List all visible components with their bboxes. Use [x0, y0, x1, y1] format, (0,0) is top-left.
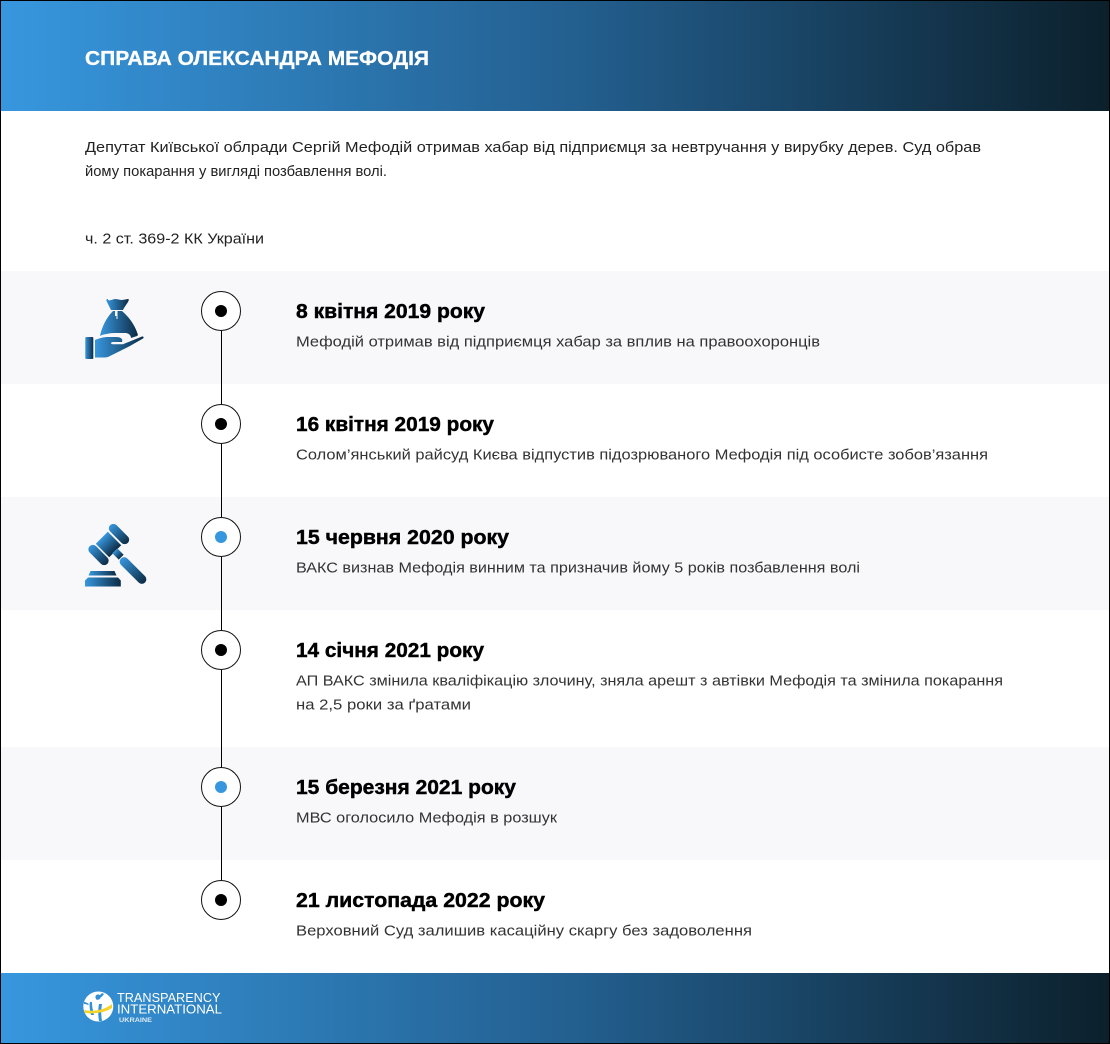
- event: 16 April 2019: Солом’янський райсуд Києва відпустив підозрюваного Мефодія під особисте зобов’язання: [296, 448, 988, 464]
- timeline marker: 15 June 2020: [202, 518, 240, 556]
- footer banner: [1, 973, 1109, 1043]
- logo: Transparency International Ukraine: TRANSPARENCY: [117, 990, 221, 1005]
- title: СПРАВА ОЛЕКСАНДРА МЕФОДІЯ: [85, 48, 429, 70]
- event: 21 November 2022: [296, 889, 752, 940]
- event: 14 January 2021: на 2,5 роки за ґратами: [296, 698, 471, 714]
- event: 8 April 2019: Мефодій отримав від підприємця хабар за вплив на правоохоронців: [296, 334, 820, 350]
- event: 8 April 2019: [296, 300, 820, 350]
- logo: Transparency International Ukraine: [83, 990, 222, 1024]
- event: 15 March 2021: 15 березня 2021 року: [296, 776, 517, 799]
- row background bands: [1, 271, 1109, 860]
- timeline axis: [221, 311, 222, 900]
- event: 14 January 2021: 14 січня 2021 року: [296, 639, 485, 662]
- event: 15 June 2020: 15 червня 2020 року: [296, 526, 510, 549]
- event: 15 June 2020: [296, 526, 860, 576]
- event: 15 June 2020: ВАКС визнав Мефодія винним та призначив йому 5 років позбавлення волі: [296, 560, 860, 576]
- event: 21 November 2022: 21 листопада 2022 року: [296, 889, 546, 912]
- event: 16 April 2019: [296, 413, 988, 464]
- event: 21 November 2022: Верховний Суд залишив касаційну скаргу без задоволення: [296, 924, 752, 940]
- icon: judge gavel: [85, 522, 148, 586]
- event: 16 April 2019: 16 квітня 2019 року: [296, 413, 495, 436]
- timeline marker: 21 November 2022: [202, 880, 240, 920]
- icon: money bag in hand: [85, 299, 144, 359]
- event: 14 January 2021: [296, 639, 1003, 714]
- timeline marker: 16 April 2019: [202, 404, 240, 444]
- intro text: Депутат Київської облради Сергій Мефодій отримав хабар від підприємця за невтручання у вирубку дерев. Суд обрав: [85, 140, 981, 156]
- event: 14 January 2021: АП ВАКС змінила кваліфікацію злочину, зняла арешт з автівки Мефодія та змінила покарання: [296, 674, 1003, 690]
- event: 8 April 2019: 8 квітня 2019 року: [296, 300, 486, 323]
- timeline marker: 14 January 2021: [202, 630, 240, 670]
- timeline marker: 8 April 2019: [202, 292, 240, 330]
- intro text: [85, 140, 981, 180]
- event: 15 March 2021: [296, 776, 558, 826]
- intro text: йому покарання у вигляді позбавлення волі.: [85, 164, 387, 180]
- timeline marker: 15 March 2021: [202, 768, 240, 806]
- logo: Transparency International Ukraine: INTERNATIONAL: [117, 1002, 222, 1016]
- header banner: [1, 1, 1109, 111]
- event: 15 March 2021: МВС оголосило Мефодія в розшук: [296, 810, 558, 826]
- logo: Transparency International Ukraine: UKRAINE: [119, 1017, 152, 1024]
- legal article reference: ч. 2 ст. 369-2 КК України: [85, 232, 264, 248]
